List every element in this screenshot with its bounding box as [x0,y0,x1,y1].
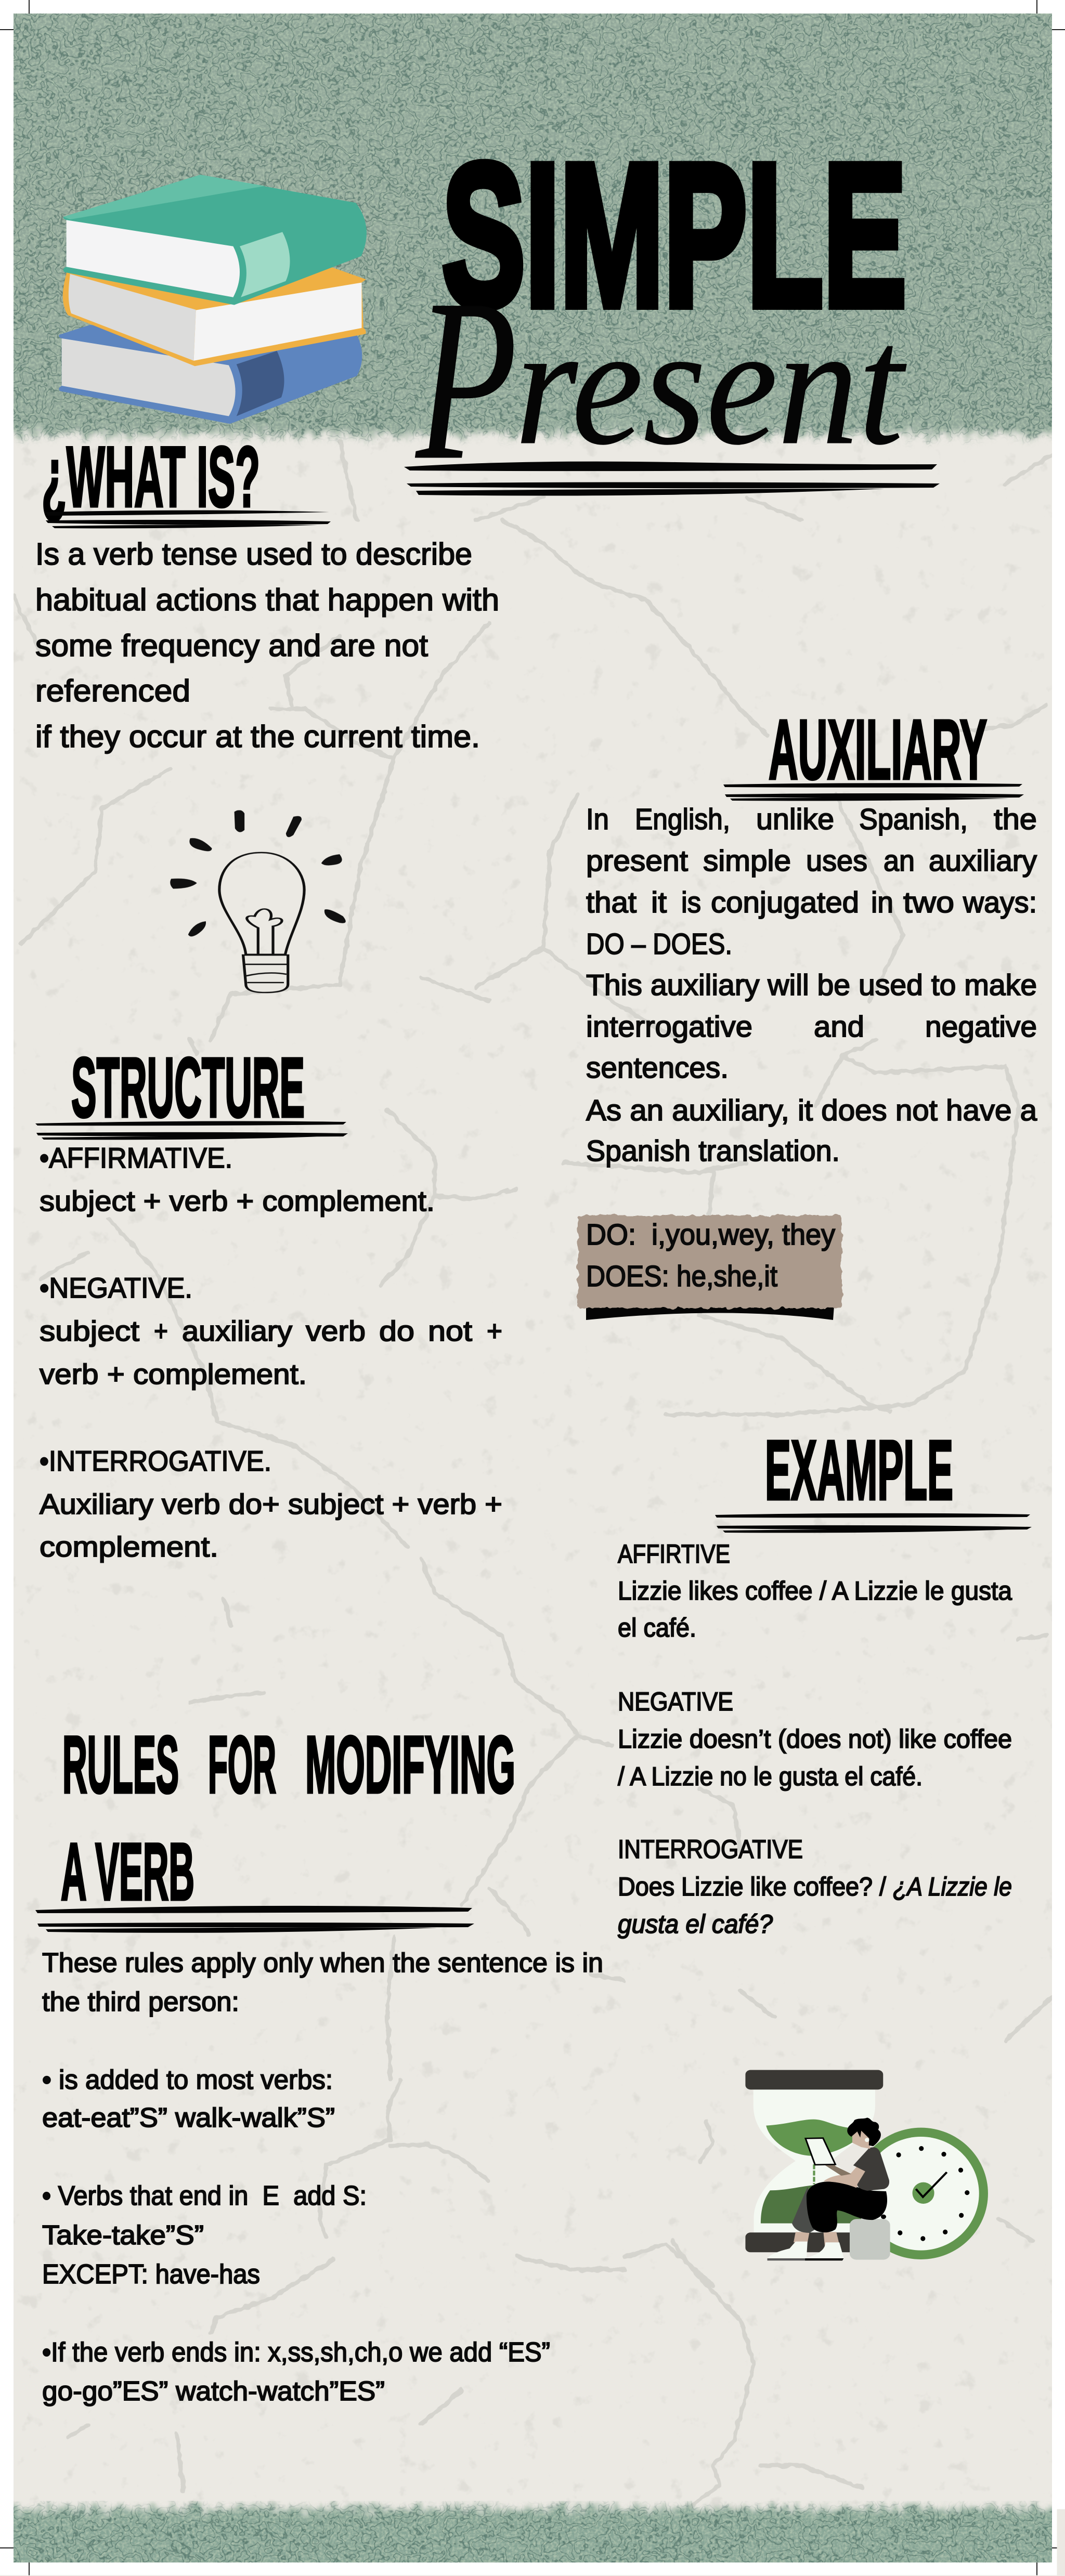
text block: rules: eat-eat”S” walk-walk”S” [42,2103,335,2133]
text block: examples: gusta el café? [618,1910,773,1939]
text block: structure: do [379,1315,414,1347]
text block: examples: NEGATIVE [618,1687,733,1716]
text block: examples: INTERROGATIVE [618,1835,803,1864]
cracks texture [14,441,1052,2510]
title: Present [413,252,909,508]
text block: structure: + [154,1315,168,1347]
text block: structure: verb + complement. [40,1358,307,1390]
brush under callout [586,1306,834,1320]
text block: auxiliary explanation: As an auxiliary, it does not have a [586,1094,1037,1127]
icon: light bulb [170,810,346,992]
clock [854,2128,988,2259]
text: MODIFYING [305,1720,515,1810]
text block: examples [618,1539,1012,1939]
text block: structure: •AFFIRMATIVE. [40,1142,232,1174]
text block: structure: + [487,1315,502,1347]
text block: what is [35,537,499,754]
callout: do and does: DO: i,you,wey, they [586,1218,835,1251]
text block: auxiliary explanation: present [586,844,688,878]
text block: auxiliary explanation: that [586,886,637,919]
text block: examples: AFFIRTIVE [618,1539,730,1568]
text block: auxiliary explanation: and [814,1010,864,1043]
text block: auxiliary explanation: In [586,803,609,836]
heading: what is: ¿WHAT IS? [42,429,260,525]
callout: do and does [578,1215,842,1320]
text block: structure: not [428,1315,472,1347]
text block: auxiliary explanation: the [994,803,1037,836]
green book [63,175,367,305]
heading: rules for modifying a verb: FOR [208,1720,276,1810]
text block: auxiliary explanation: English, [635,803,730,836]
text block: rules: These rules apply only when the sentence is in [42,1948,603,1978]
text block: rules: go-go”ES” watch-watch”ES” [42,2376,385,2407]
person [768,2117,889,2260]
text block: auxiliary explanation: Spanish, [859,803,968,836]
heading: structure: STRUCTURE [71,1040,305,1135]
text block: rules: EXCEPT: have-has [42,2259,260,2290]
text block: structure: •NEGATIVE. [40,1272,192,1304]
blue book [59,325,362,424]
text block: auxiliary explanation: sentences. [586,1051,729,1084]
orange book [63,267,366,366]
rays [170,810,346,936]
illustration: hourglass, clock and person [745,2070,988,2260]
text block: structure: •INTERROGATIVE. [40,1445,271,1477]
icon: stack of books [59,175,367,424]
text block: examples: el café. [618,1613,696,1642]
text block: what is: Is a verb tense used to describe [35,537,472,571]
text block: what is: if they occur at the current time. [35,720,480,754]
stool [850,2219,890,2260]
hourglass [745,2070,883,2252]
text block: examples: ¿A Lizzie le [893,1872,1012,1901]
text block: auxiliary explanation: it [651,886,667,919]
heading: rules for modifying a verb [35,1720,515,1933]
callout: do and does: DOES: he,she,it [586,1260,777,1293]
text block: auxiliary explanation: conjugated [711,886,859,919]
bulb outline [219,853,304,954]
text block: structure: verb [306,1315,366,1347]
text block: auxiliary explanation: two [903,886,954,919]
text block: auxiliary explanation: This auxiliary will be used to make [586,969,1037,1002]
text block: examples: Does Lizzie like coffee? / [618,1872,886,1901]
text block: auxiliary explanation: interrogative [586,1010,752,1043]
text block: auxiliary explanation: DO – DOES. [586,927,732,961]
text block: examples: Lizzie likes coffee / A Lizzie le gusta [618,1576,1012,1605]
heading: what is [42,429,331,528]
text block: auxiliary explanation: unlike [756,803,834,836]
text block: auxiliary explanation: ways: [963,886,1037,919]
text block: examples: Lizzie doesn’t (does not) like coffee [618,1724,1012,1754]
panel: torn green footer [0,2507,1065,2576]
text block: structure: auxiliary [182,1315,293,1347]
title: Present: resent [515,291,909,480]
text block: structure: complement. [40,1531,218,1563]
text block: rules: •If the verb ends in: x,ss,sh,ch,o we add “ES” [42,2337,550,2368]
text block: rules: the third person: [42,1987,239,2017]
text block: what is: referenced [35,674,190,708]
text block: rules: Take-take”S” [42,2220,204,2251]
text block: auxiliary explanation: negative [925,1010,1037,1043]
text block: structure [40,1142,502,1563]
callout box [578,1215,842,1308]
text block: what is: some frequency and are not [35,629,428,663]
text block: auxiliary explanation: uses [806,844,867,878]
text block: auxiliary explanation: is [681,886,701,919]
heading: example [715,1422,1032,1533]
text block: structure: subject [40,1315,139,1347]
text block: structure: Auxiliary verb do+ subject + verb + [40,1488,502,1520]
heading: rules for modifying a verb: RULES [62,1720,179,1810]
title: Present: P [413,252,517,508]
text block: structure: subject + verb + complement. [40,1185,435,1217]
text block: auxiliary explanation: an [884,844,915,878]
text block: rules: • Verbs that end in E add S: [42,2181,367,2211]
text block: auxiliary explanation [586,803,1037,1168]
heading: structure [35,1040,348,1140]
text block: auxiliary explanation: Spanish translation. [586,1134,840,1168]
text block: auxiliary explanation: simple [703,844,791,878]
panel: torn green header [0,0,1065,436]
text block: rules: • is added to most verbs: [42,2065,333,2095]
text block: rules [42,1948,603,2407]
text block: auxiliary explanation: in [871,886,893,919]
bulb base [243,955,288,992]
text block: examples: / A Lizzie no le gusta el café. [618,1762,923,1791]
heading: rules for modifying a verb: A VERB [61,1827,194,1917]
title underline strokes [404,462,940,496]
text block: auxiliary explanation: auxiliary [929,844,1037,878]
text block: what is: habitual actions that happen with [35,583,499,617]
